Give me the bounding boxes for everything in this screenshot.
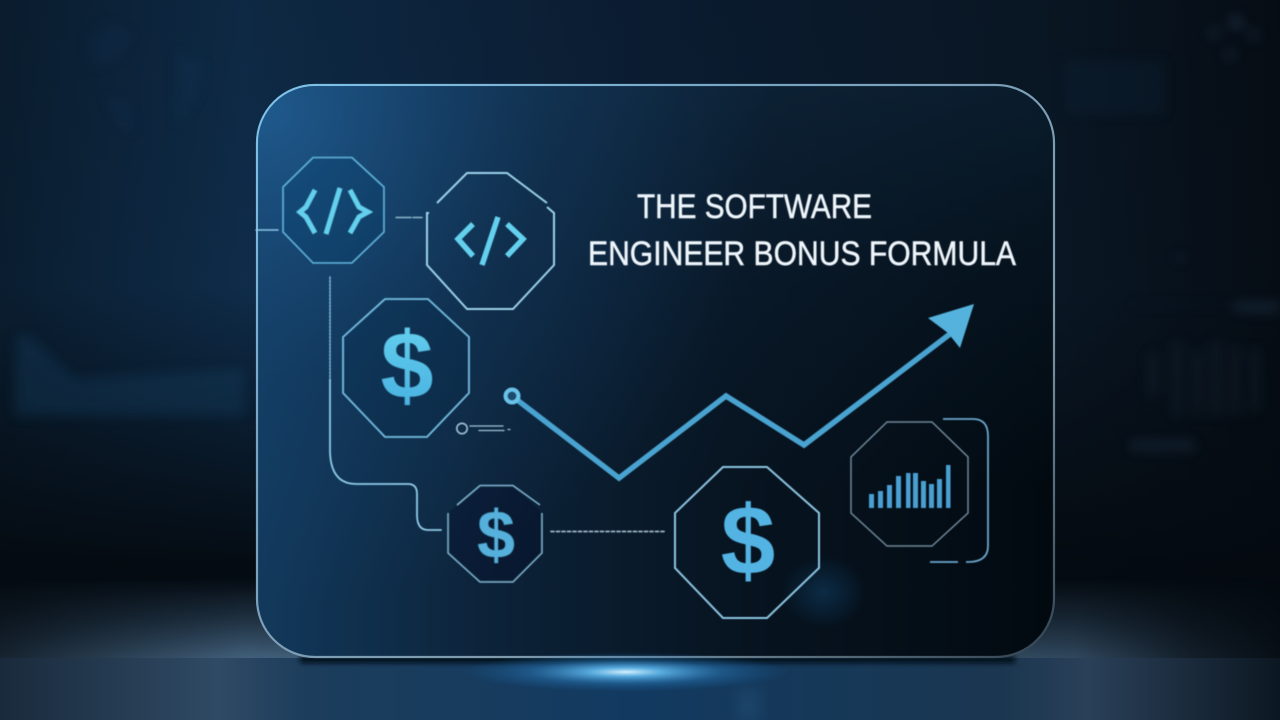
glow under card <box>461 652 791 692</box>
icon: small dollar octagon: $ <box>477 497 515 573</box>
rising line chart <box>506 304 974 478</box>
start dot <box>506 390 518 402</box>
title line 1: THE SOFTWARE <box>637 188 872 226</box>
icon: small code octagon <box>283 158 384 263</box>
shadow under card <box>300 656 1015 663</box>
icon: bar chart octagon <box>851 419 988 562</box>
icon: large dollar octagon <box>675 467 819 618</box>
bracket <box>930 419 988 562</box>
card top lightening <box>258 86 1053 656</box>
icon: small dollar octagon <box>448 486 542 582</box>
icon: large dollar octagon: $ <box>721 485 775 595</box>
glow beside large dollar <box>782 556 866 628</box>
card top-left sheen <box>258 86 1053 656</box>
main glass card <box>257 85 1054 692</box>
bars <box>869 465 950 508</box>
icon: large code octagon <box>427 173 554 309</box>
arrowhead <box>928 304 974 348</box>
connector: card edge to first code icon <box>256 229 278 231</box>
connector lines <box>256 218 665 532</box>
icon: dollar octagon: $ <box>381 313 433 419</box>
connector: code icon to code icon <box>396 216 422 218</box>
title line 2: ENGINEER BONUS FORMULA <box>588 235 1016 273</box>
title <box>588 188 1016 273</box>
blurred background shapes <box>14 15 1280 451</box>
reflective floor <box>0 578 1280 720</box>
connector: dotted vertical and curved path to small dollar <box>329 277 331 380</box>
connector: dotted small dollar to large dollar <box>551 530 665 532</box>
small node with ticks <box>457 423 510 434</box>
icon: dollar octagon <box>343 299 469 437</box>
card body <box>257 85 1054 657</box>
trend line <box>512 334 950 478</box>
